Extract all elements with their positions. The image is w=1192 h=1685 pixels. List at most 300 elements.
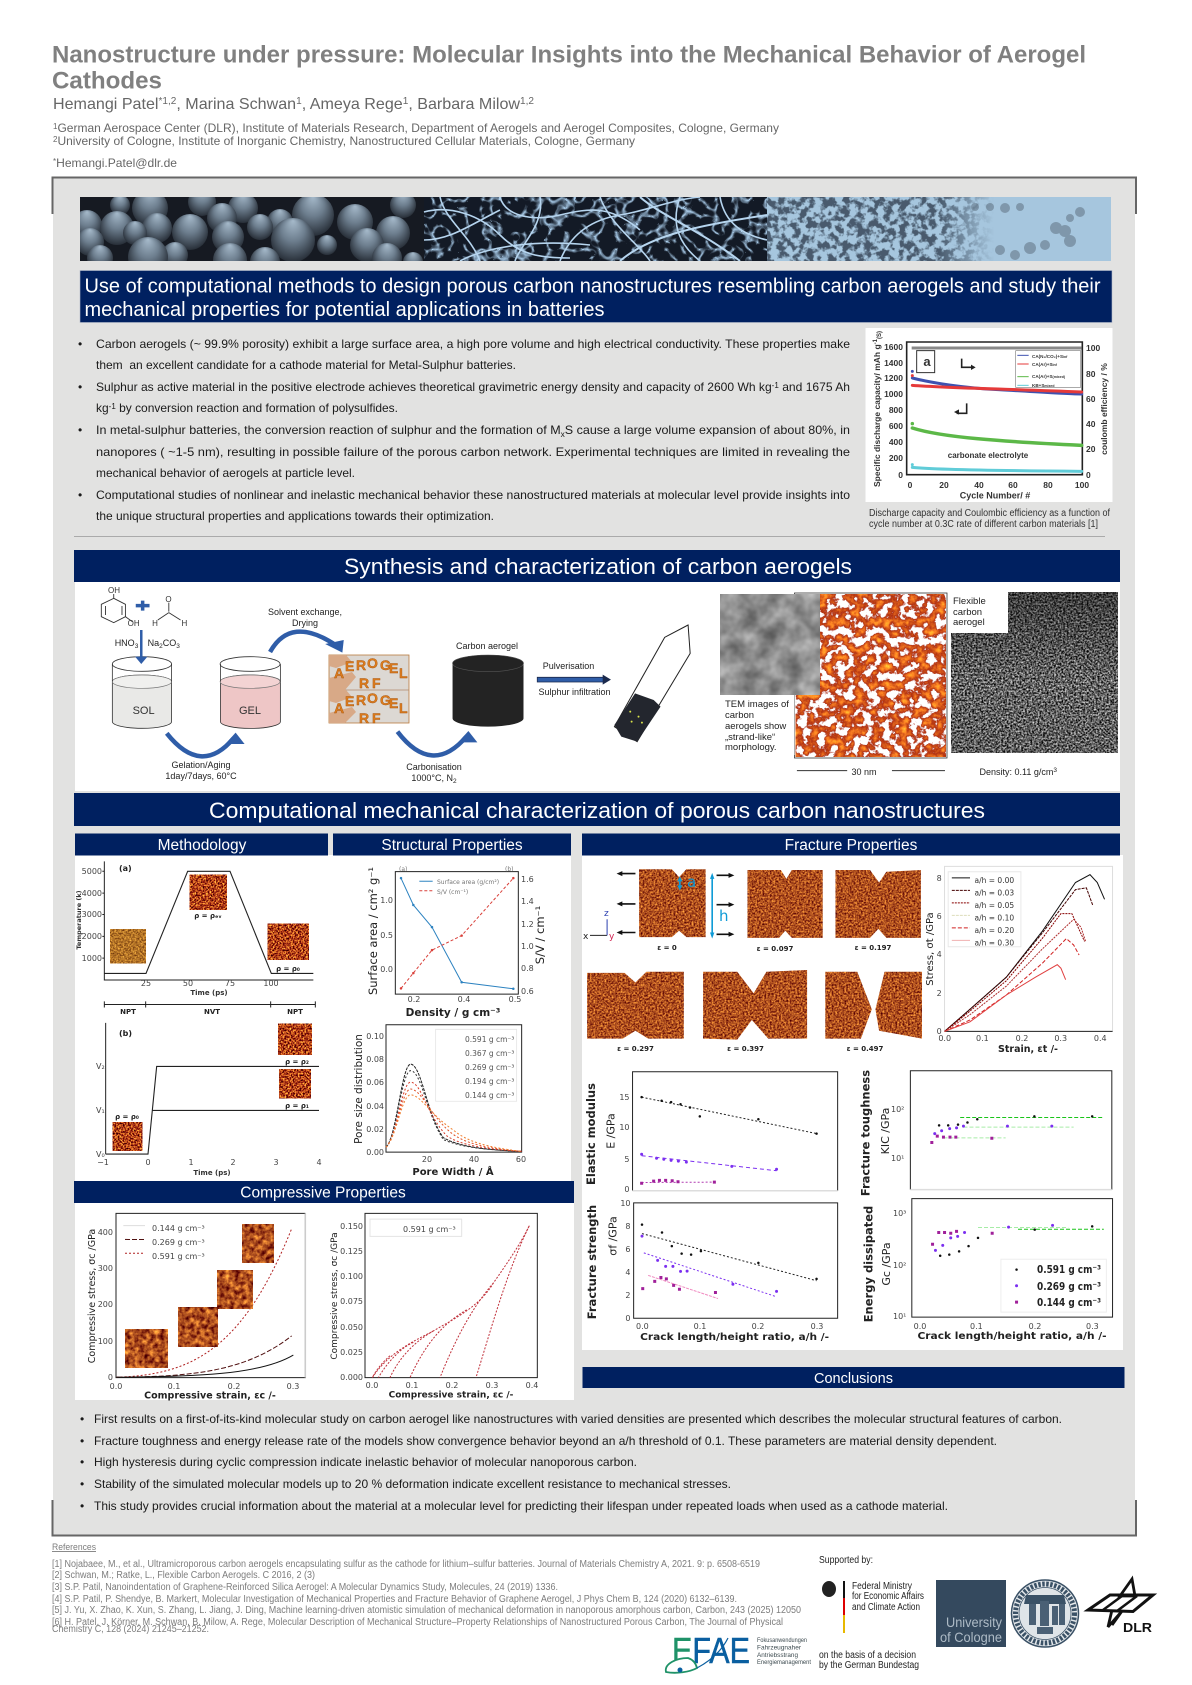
logo: university of cologne: of Cologne xyxy=(940,1629,1002,1645)
cyclic compression chart: 0.1 xyxy=(406,1381,418,1390)
temperature schedule chart: 4000 xyxy=(82,889,102,898)
volume schedule chart: V₀ xyxy=(96,1150,105,1159)
axes text: 40 xyxy=(1086,419,1096,429)
logo: EFAE: Fahrzeugnaher xyxy=(757,1646,801,1652)
stress strain chart: 0.3 xyxy=(1054,1034,1067,1043)
logo: EFAE: Antriebsstrang xyxy=(757,1653,798,1659)
energy dissipated chart: Gc /GPa xyxy=(880,1242,893,1286)
references: [6] H. Patel, J. Körner, M. Schwan, B. Milow, A. Rege, Molecular Description of Mechanical Structure–Property Relationships of Nanostructured Porous Carbon, The Journal of Physical xyxy=(52,1617,783,1628)
temperature schedule chart: 100 xyxy=(263,979,279,988)
stress strain chart: 0.2 xyxy=(1016,1034,1028,1043)
introduction bullets: -1 xyxy=(109,402,116,411)
surface area chart: 0.6 xyxy=(521,987,534,996)
introduction bullets: Computational studies of nonlinear and inelastic mechanical behavior these nanostructured materials at molecular level provide insights into xyxy=(96,488,850,502)
introduction bullets: the unique structural properties and applications towards their optimization. xyxy=(96,509,494,523)
process labels: Gelation/Aging xyxy=(171,760,231,770)
fracture snapshots: z xyxy=(604,909,609,919)
banner image xyxy=(80,197,1111,261)
process labels: 1day/7days, 60°C xyxy=(165,771,237,781)
surface area chart: 1.2 xyxy=(521,920,534,929)
stress strain chart: a/h = 0.00 xyxy=(974,876,1014,885)
headline bar xyxy=(80,270,1112,322)
process labels: 30 nm xyxy=(851,767,877,777)
introduction bullets: kg xyxy=(96,401,109,415)
SEM caption: aerogel xyxy=(953,617,985,628)
axes text: coulomb efficiency / % xyxy=(1099,363,1109,455)
fracture toughness chart xyxy=(858,1070,1112,1196)
temperature schedule chart: NPT xyxy=(120,1008,136,1016)
introduction bullets: Sulphur as active material in the positive electrode achieves theoretical gravimetric energy density and capacity of 2600 Wh kg xyxy=(96,380,768,394)
initial model cube xyxy=(110,929,146,964)
process labels: Density: 0.11 g/cm xyxy=(980,767,1053,777)
fracture strength chart: 0.2 xyxy=(752,1322,764,1331)
compressive stress chart: 0.2 xyxy=(228,1382,240,1391)
volume schedule chart xyxy=(96,1023,322,1177)
fracture snapshots: ε = 0.497 xyxy=(847,1045,884,1053)
surface area chart: 1.4 xyxy=(521,897,534,906)
chart caption: Discharge capacity and Coulombic efficiency as a function of xyxy=(869,508,1110,519)
axes text: 600 xyxy=(889,421,903,431)
computational heading xyxy=(74,793,1120,826)
sample tube xyxy=(614,625,690,742)
molecules xyxy=(101,594,181,623)
conclusions bullets: • xyxy=(80,1499,84,1513)
axes text: 1600 xyxy=(884,342,903,352)
cyclic compression chart: 0.3 xyxy=(486,1381,498,1390)
volume schedule chart: V₁ xyxy=(96,1106,105,1115)
surface area chart: 0.2 xyxy=(408,995,420,1004)
particles xyxy=(767,197,990,261)
references: [5] J. Yu, X. Zhao, K. Xun, S. Zhang, L. Jiang, J. Ding, Machine learning-driven atomistic simulation of mechanical deformation in nanoporous amorphous carbon, Carbon, 243 (2025) 12050 xyxy=(52,1605,801,1616)
methodology heading: Methodology xyxy=(158,837,247,854)
authors: *1,2 xyxy=(158,96,177,107)
fracture strength chart: 4 xyxy=(625,1268,630,1277)
temperature schedule chart: 5000 xyxy=(82,867,102,876)
fracture strength chart: 0.0 xyxy=(636,1322,649,1331)
axes text: 40 xyxy=(974,480,984,490)
axes text: a xyxy=(923,354,931,369)
scale arrows xyxy=(797,770,945,772)
temperature schedule chart: Time (ps) xyxy=(190,989,228,997)
headline bar: Use of computational methods to design porous carbon nanostructures resembling carbon aerogels and study their xyxy=(84,274,1101,298)
conclusions bullets: Stability of the simulated molecular models up to 20 % deformation indicate excellent resistance to mechanical stresses. xyxy=(94,1477,731,1491)
fracture snapshots xyxy=(583,869,922,1053)
synthesis panel xyxy=(75,582,1120,791)
stress strain chart: 4 xyxy=(937,950,942,959)
aerogel photo: RF xyxy=(359,675,381,691)
volume schedule chart: ρ = ρ₁ xyxy=(285,1102,309,1110)
cyclic compression chart: 0.050 xyxy=(340,1323,363,1332)
process labels: 3 xyxy=(1053,767,1057,774)
authors: 1 xyxy=(296,96,302,107)
temperature schedule chart: ρ = ρₑᵥ xyxy=(194,912,222,920)
fracture toughness chart: KIC /GPa xyxy=(879,1108,892,1154)
axes text: 800 xyxy=(889,405,903,415)
axes text: Cycle Number/ # xyxy=(960,490,1030,500)
volume schedule chart: ρ = ρ₂ xyxy=(285,1058,309,1066)
axes text: (S) xyxy=(877,331,883,339)
cyclic compression chart: 0.100 xyxy=(340,1272,363,1281)
elastic modulus chart: 10 xyxy=(619,1123,630,1132)
affiliations xyxy=(53,121,779,148)
pore size chart: 0.02 xyxy=(366,1125,384,1134)
plot curves xyxy=(907,342,1082,475)
process labels: OH xyxy=(128,619,140,628)
pore size chart: Pore Width / Å xyxy=(412,1165,494,1178)
fracture strength chart: Crack length/height ratio, a/h /- xyxy=(640,1332,829,1343)
references: [4] S.P. Patil, P. Shendye, B. Markert, Molecular Investigation of Mechanical Properties and Fracture Behavior of Graphene Aerogel, J Phys Chem B, 124 (2020) 6132–6139. xyxy=(52,1594,737,1605)
energy dissipated chart: 0.0 xyxy=(914,1322,926,1331)
fracture strength chart: 0 xyxy=(625,1314,630,1323)
temperature schedule chart: Temperature (k) xyxy=(75,890,83,950)
arrows xyxy=(140,630,143,659)
process labels: HNO xyxy=(115,638,135,648)
conclusions heading xyxy=(582,1367,1124,1388)
surface area chart: 1.6 xyxy=(521,875,534,884)
cyclic compression chart: 0.150 xyxy=(340,1222,363,1231)
axes text: 400 xyxy=(889,437,903,447)
aerogel photo: AEROGEL xyxy=(334,690,408,716)
references: [3] S.P. Patil, Nanoindentation of Graphene-Reinforced Silica Aerogel: A Molecular Dynamics Study, Molecules, 24 (2019) 1336. xyxy=(52,1582,558,1593)
stress strain chart: a/h = 0.20 xyxy=(974,926,1014,935)
affiliations: 2 xyxy=(53,135,58,144)
pore size chart: 0.08 xyxy=(366,1055,384,1064)
fracture snapshots: x xyxy=(583,932,589,942)
fracture strength chart: 10 xyxy=(620,1199,630,1208)
compressive stress chart: 200 xyxy=(98,1300,113,1309)
fracture snapshots: ε = 0.297 xyxy=(617,1045,654,1053)
cyclic compression chart: 0.075 xyxy=(340,1297,363,1306)
surface area chart: 0.4 xyxy=(458,995,470,1004)
pore size chart: 0.367 g cm⁻³ xyxy=(465,1049,514,1058)
temperature schedule chart: 25 xyxy=(141,979,151,988)
logo: university seal xyxy=(1012,1580,1078,1647)
process labels xyxy=(108,586,1057,785)
introduction bullets: and 1675 Ah xyxy=(779,380,850,394)
GEL beaker xyxy=(220,657,280,728)
authors: 1,2 xyxy=(520,96,534,107)
axes text: 1200 xyxy=(884,373,903,383)
chart caption xyxy=(869,508,1110,530)
surface area chart: Surface area (g/cm²) xyxy=(437,879,499,886)
introduction bullets: In metal-sulphur batteries, the conversion reaction of sulphur and the formation of M xyxy=(96,423,542,437)
compressive stress chart: 100 xyxy=(98,1337,113,1346)
bundestag note: by the German Bundestag xyxy=(819,1660,919,1671)
temperature schedule chart: ρ = ρ₀ xyxy=(276,965,300,973)
energy dissipated chart: 0.591 g cm⁻³ xyxy=(1037,1263,1101,1276)
compressive stress chart: 400 xyxy=(98,1228,113,1237)
fracture strength chart: 8 xyxy=(625,1222,630,1231)
methodology heading xyxy=(75,834,328,856)
compressive stress chart: Compressive strain, εc /- xyxy=(144,1390,276,1402)
authors: , Ameya Rege xyxy=(302,96,403,113)
temperature schedule chart: 1000 xyxy=(82,954,102,963)
stress strain chart: 8 xyxy=(937,874,942,883)
heated model cube xyxy=(190,874,227,910)
fracture strength chart: 6 xyxy=(625,1245,630,1254)
fracture toughness chart: 10¹ xyxy=(891,1154,904,1163)
process labels: 1000°C, N xyxy=(411,773,453,783)
strained cube 1 xyxy=(279,1069,311,1098)
logo: university of cologne: University xyxy=(946,1614,1002,1630)
process labels: 3 xyxy=(176,643,180,650)
volume schedule chart: 2 xyxy=(230,1158,236,1167)
email: * xyxy=(53,157,56,166)
energy dissipated chart: 0.269 g cm⁻³ xyxy=(1037,1280,1101,1293)
compressive properties panel xyxy=(74,1181,574,1402)
conclusions bullets: Fracture toughness and energy release rate of the models show convergence behavior beyond an a/h threshold of 0.1. These parameters are material density dependent. xyxy=(94,1434,997,1448)
affiliations: 1 xyxy=(53,122,58,131)
reference cube xyxy=(112,1122,142,1151)
energy dissipated chart: 10³ xyxy=(893,1209,906,1218)
pore size chart: 0.269 g cm⁻³ xyxy=(465,1063,514,1072)
pore size chart: 0.10 xyxy=(366,1032,384,1041)
surface area chart: Surface area / cm² g⁻¹ xyxy=(366,867,380,995)
SEM caption: Flexible xyxy=(953,596,986,607)
pore size chart: 0.591 g cm⁻³ xyxy=(465,1035,514,1044)
authors: , Marina Schwan xyxy=(176,96,296,113)
authors: Hemangi Patel xyxy=(53,96,158,113)
bundestag note: on the basis of a decision xyxy=(819,1650,916,1661)
axes text: KB+Smixed xyxy=(1032,383,1055,388)
references: [1] Nojabaee, M., et al., Ultramicroporous carbon aerogels encapsulating sulfur as the cathode for lithium–sulfur batteries. Journal of Materials Chemistry A, 2021. 9: p. 6508-6519 xyxy=(52,1559,760,1570)
axes text: 0 xyxy=(908,480,913,490)
process labels: 2 xyxy=(453,778,457,785)
process labels: H xyxy=(152,619,158,628)
compressed cubes xyxy=(125,1329,168,1368)
conclusions bullets: • xyxy=(80,1455,84,1469)
SEM caption xyxy=(953,596,986,628)
energy dissipated chart: 0.1 xyxy=(970,1322,983,1331)
cyclic compression chart: 0.000 xyxy=(340,1373,363,1382)
introduction bullets: • xyxy=(78,337,82,351)
compressive stress chart: 0.591 g cm⁻³ xyxy=(152,1252,205,1261)
axes text: 100 xyxy=(1075,480,1089,490)
compressive stress chart: 0.144 g cm⁻³ xyxy=(152,1224,205,1233)
stress strain chart xyxy=(925,866,1113,1055)
surface area chart: Density / g cm⁻³ xyxy=(406,1007,501,1019)
temperature schedule chart: 75 xyxy=(225,979,235,988)
temperature schedule chart: 2000 xyxy=(82,932,102,941)
structural heading xyxy=(333,834,571,856)
strand-like model image xyxy=(794,593,947,758)
axes text: 20 xyxy=(939,480,949,490)
energy dissipated chart: 0.144 g cm⁻³ xyxy=(1037,1296,1101,1309)
elastic modulus chart: 15 xyxy=(619,1093,630,1102)
volume schedule chart: 0 xyxy=(145,1158,151,1167)
cyclic compression chart: Compressive strain, εc /- xyxy=(389,1390,514,1400)
volume schedule chart: 1 xyxy=(188,1158,194,1167)
main grey panel xyxy=(52,177,1136,1536)
compressive stress chart: 0.1 xyxy=(168,1382,180,1391)
axes text: CA(Ar)+S(mixed) xyxy=(1032,374,1065,379)
energy dissipated chart: 0.3 xyxy=(1086,1322,1099,1331)
introduction bullets: Carbon aerogels (~ 99.9% porosity) exhibit a large surface area, a high pore volume and high electrical conductivity. These properties make xyxy=(96,337,850,351)
process labels: Carbonisation xyxy=(406,762,462,772)
energy dissipated chart: 10² xyxy=(893,1261,906,1270)
fracture strength chart xyxy=(585,1199,838,1343)
fracture snapshots: ε = 0 xyxy=(657,944,677,952)
process labels: Sulphur infiltration xyxy=(538,687,611,697)
fracture strength chart: σf /GPa xyxy=(607,1216,620,1256)
introduction bullets: by conversion reaction and formation of polysulfides. xyxy=(116,401,398,415)
process labels: GEL xyxy=(239,705,261,717)
conclusions bullets: This study provides crucial information about the material at a molecular level for predicting their lifespan under repeated loads when used as a cathode material. xyxy=(94,1499,948,1513)
conclusions bullets: • xyxy=(80,1477,84,1491)
pore size chart: Pore size distribution xyxy=(353,1034,365,1144)
authors: 1 xyxy=(403,96,409,107)
compressive stress chart: 0.269 g cm⁻³ xyxy=(152,1238,205,1247)
process labels: Solvent exchange, xyxy=(268,607,342,617)
fracture strength chart: 0.3 xyxy=(811,1322,823,1331)
cyclic compression chart: 0.4 xyxy=(526,1381,538,1390)
volume schedule chart: ρ = ρ₀ xyxy=(115,1113,139,1121)
stress strain chart: 0.0 xyxy=(938,1034,951,1043)
computational heading: Computational mechanical characterization of porous carbon nanostructures xyxy=(209,798,985,823)
plus sign xyxy=(136,601,150,611)
compressive stress chart: 0 xyxy=(108,1373,113,1382)
bundestag note xyxy=(819,1650,919,1671)
logo: EFAE: Energiemanagement xyxy=(757,1660,811,1666)
volume schedule chart: −1 xyxy=(97,1158,109,1167)
process labels: OH xyxy=(108,586,120,595)
fracture strength chart: 2 xyxy=(625,1291,630,1300)
references: Chemistry C, 128 (2024) 21245–21252. xyxy=(52,1624,209,1635)
axes text: 0 xyxy=(898,470,903,480)
introduction bullets: mechanical behavior of aerogels at particle level. xyxy=(96,466,355,480)
temperature schedule chart: 50 xyxy=(183,979,193,988)
process flow shapes xyxy=(101,594,945,771)
TEM caption: morphology. xyxy=(725,742,777,753)
affiliations: University of Cologne, Institute of Inorganic Chemistry, Nanostructured Cellular Materials, Cologne, Germany xyxy=(57,134,635,148)
conclusions bullets: High hysteresis during cyclic compression indicate inelastic behavior of molecular nanoporous carbon. xyxy=(94,1455,637,1469)
aerogel photo: RF xyxy=(359,710,381,726)
cyclic compression chart: 0.0 xyxy=(366,1381,378,1390)
axes text: 20 xyxy=(1086,444,1096,454)
process labels: Pulverisation xyxy=(543,661,594,671)
synthesis heading: Synthesis and characterization of carbon aerogels xyxy=(344,554,852,579)
fracture snapshots: ε = 0.197 xyxy=(855,944,892,952)
compressive stress chart: 300 xyxy=(98,1264,113,1273)
process labels: CO xyxy=(163,638,176,648)
axes text: carbonate electrolyte xyxy=(948,451,1029,460)
fracture snapshots: ε = 0.397 xyxy=(727,1045,764,1053)
surface area chart: 0.0 xyxy=(380,965,393,974)
surface area chart: 0.8 xyxy=(521,964,534,973)
temperature schedule chart xyxy=(75,861,315,1016)
TEM caption: TEM images of xyxy=(725,699,789,710)
introduction bullets: -1 xyxy=(772,381,779,390)
fracture snapshots: y xyxy=(609,932,615,942)
TEM image xyxy=(720,594,820,695)
elastic modulus chart: 0 xyxy=(624,1185,630,1194)
axes text: 1000 xyxy=(884,389,903,399)
compressive heading xyxy=(74,1181,574,1203)
conclusions bullets xyxy=(80,1412,1062,1513)
process labels: Carbon aerogel xyxy=(456,641,518,651)
logo: university of cologne xyxy=(936,1580,1006,1647)
pore size chart xyxy=(353,1025,526,1178)
stress strain chart: 2 xyxy=(937,989,942,998)
volume schedule chart: V₂ xyxy=(96,1062,105,1071)
process labels: SOL xyxy=(133,705,155,717)
headline bar: mechanical properties for potential applications in batteries xyxy=(84,298,604,321)
references xyxy=(52,1542,801,1635)
temperature schedule chart: 3000 xyxy=(82,910,102,919)
fibres xyxy=(424,197,767,261)
volume schedule chart: 3 xyxy=(273,1158,279,1167)
stress strain chart: a/h = 0.03 xyxy=(974,888,1014,898)
temperature schedule chart: NVT xyxy=(204,1008,220,1016)
conclusions bullets: • xyxy=(80,1412,84,1426)
energy dissipated chart: Energy dissipated xyxy=(861,1206,875,1322)
axes text: 200 xyxy=(889,453,903,463)
axes text: 80 xyxy=(1043,480,1053,490)
logo: DLR xyxy=(1088,1579,1153,1635)
elastic modulus chart xyxy=(584,1072,838,1194)
cooled model cube xyxy=(268,924,309,960)
TEM caption: „strand-like“ xyxy=(725,732,775,743)
logo: EFAE xyxy=(666,1630,811,1673)
elastic modulus chart: 5 xyxy=(624,1155,630,1164)
volume schedule chart: (b) xyxy=(119,1029,132,1038)
affiliations: German Aerospace Center (DLR), Institute of Materials Research, Department of Aerogels and Aerogel Composites, Cologne, Germany xyxy=(57,121,779,135)
axes text: 60 xyxy=(1008,480,1018,490)
cyclic compression chart: 0.2 xyxy=(446,1381,458,1390)
pore size chart: 20 xyxy=(422,1155,432,1164)
title: Nanostructure under pressure: Molecular Insights into the Mechanical Behavior of Aerogel xyxy=(52,42,1086,68)
pore size chart: 0.194 g cm⁻³ xyxy=(465,1077,514,1086)
surface area chart: 0.5 xyxy=(380,931,393,940)
logo: federal ministry: and Climate Action xyxy=(852,1602,920,1613)
axes text: 80 xyxy=(1086,369,1096,379)
surface area chart xyxy=(366,866,547,1019)
SEM image xyxy=(951,592,1118,753)
surface area chart: 1.0 xyxy=(380,896,393,905)
axes text: CA(Ar)+Sinf xyxy=(1032,362,1058,367)
logo: EFAE: EFAE xyxy=(672,1630,750,1671)
fracture snapshots: ε = 0.097 xyxy=(757,945,794,953)
stress strain chart: 6 xyxy=(937,912,942,921)
carbon aerogel cylinder xyxy=(453,655,523,727)
fracture toughness chart: Fracture toughness xyxy=(858,1070,872,1196)
stress strain chart: a/h = 0.30 xyxy=(974,938,1014,948)
process labels: 2 xyxy=(159,643,163,650)
fracture strength chart: Fracture strength xyxy=(585,1205,599,1319)
chart caption: cycle number at 0.3C rate of different carbon materials [1] xyxy=(869,519,1098,530)
logo: federal ministry: Federal Ministry xyxy=(852,1581,912,1592)
discharge capacity chart xyxy=(866,328,1112,502)
methodology and structure panel xyxy=(75,834,571,1181)
structural heading: Structural Properties xyxy=(381,837,523,854)
TEM caption: aerogels show xyxy=(725,721,786,732)
references: References xyxy=(52,1542,96,1552)
temperature schedule chart: NPT xyxy=(287,1008,303,1016)
cyclic compression chart: 0.025 xyxy=(340,1348,363,1357)
compressive heading: Compressive Properties xyxy=(240,1184,406,1202)
synthesis heading xyxy=(74,550,1120,582)
energy dissipated chart xyxy=(861,1199,1113,1342)
TEM caption xyxy=(720,695,794,755)
conclusions bullets: • xyxy=(80,1434,84,1448)
logo: EFAE: Fokusanwendungen xyxy=(757,1638,807,1644)
introduction bullets: S cause a large volume expansion of about 80%, in xyxy=(565,423,850,437)
stress strain chart: Strain, εt /- xyxy=(998,1044,1058,1055)
energy dissipated chart: Crack length/height ratio, a/h /- xyxy=(918,1331,1106,1342)
surface area chart: (a) xyxy=(399,866,407,873)
temperature schedule chart: (a) xyxy=(119,864,132,873)
aerogel photo xyxy=(329,655,409,726)
